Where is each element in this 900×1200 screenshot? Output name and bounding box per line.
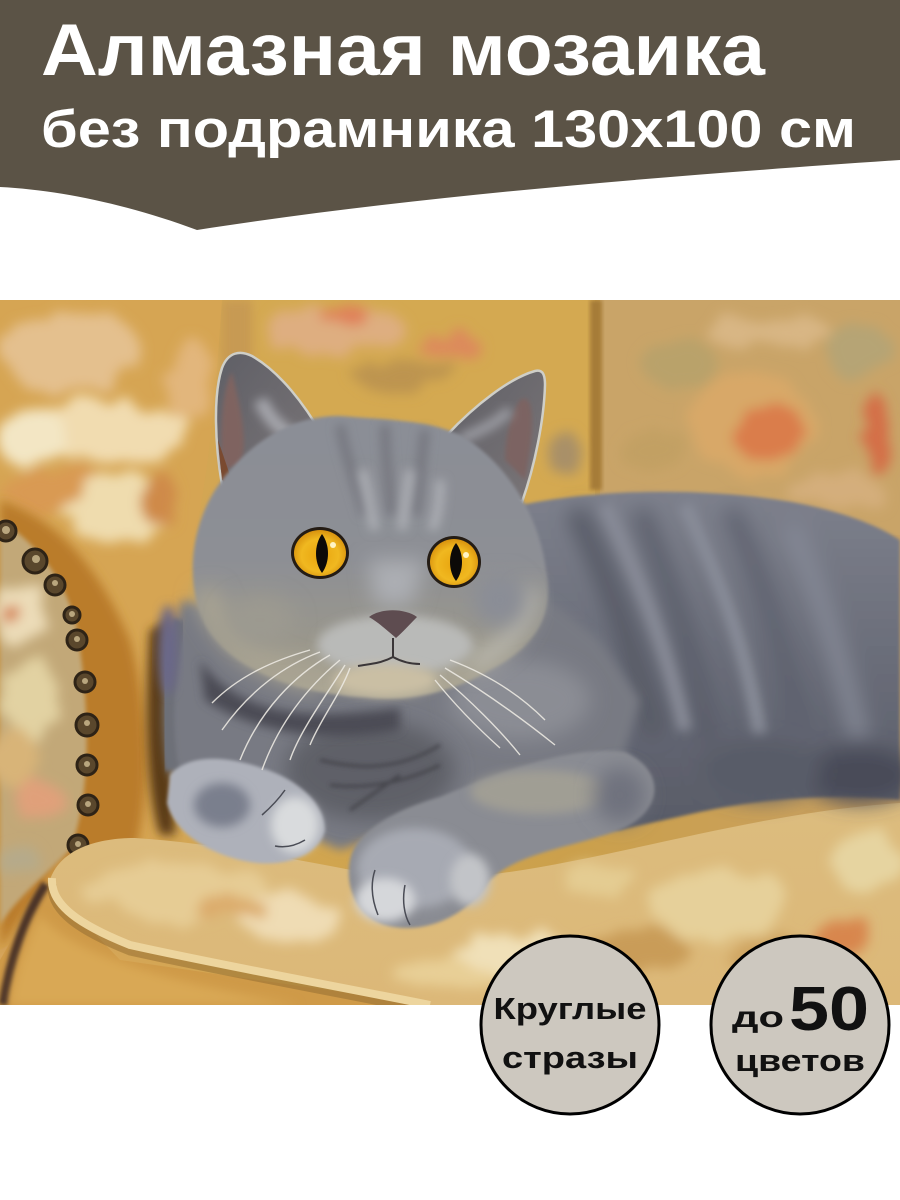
upholstery studs xyxy=(0,521,98,855)
badge: up to 50 colours: цветов xyxy=(735,1043,865,1078)
painting: grey cat on a golden sofa xyxy=(0,300,900,1011)
title: Алмазная мозаика xyxy=(41,10,767,91)
badge: round rhinestones xyxy=(481,936,659,1114)
cat whiskers xyxy=(212,650,555,770)
badge: up to 50 colours: до xyxy=(732,1001,784,1034)
sofa back cushions xyxy=(222,300,900,535)
cat chest xyxy=(158,600,640,850)
badge: up to 50 colours: 50 xyxy=(789,975,869,1044)
cat body xyxy=(524,490,900,832)
cat head xyxy=(193,416,548,699)
muzzle xyxy=(317,615,473,675)
cat left eye xyxy=(291,527,349,579)
sofa seat cushion xyxy=(0,803,900,1011)
badge: round rhinestones: Круглые xyxy=(494,991,646,1026)
cat right ear xyxy=(447,371,545,502)
badge: up to 50 colours xyxy=(711,936,889,1114)
header banner xyxy=(0,0,900,230)
cat front right leg and paw xyxy=(349,751,654,928)
cat left ear xyxy=(216,353,322,490)
sofa left arm xyxy=(0,300,222,950)
cat nose and mouth xyxy=(358,610,420,666)
cat right eye xyxy=(427,536,481,588)
subtitle: без подрамника 130х100 см xyxy=(41,100,856,159)
badge: round rhinestones: стразы xyxy=(502,1040,638,1075)
cat front left paw xyxy=(167,759,325,863)
